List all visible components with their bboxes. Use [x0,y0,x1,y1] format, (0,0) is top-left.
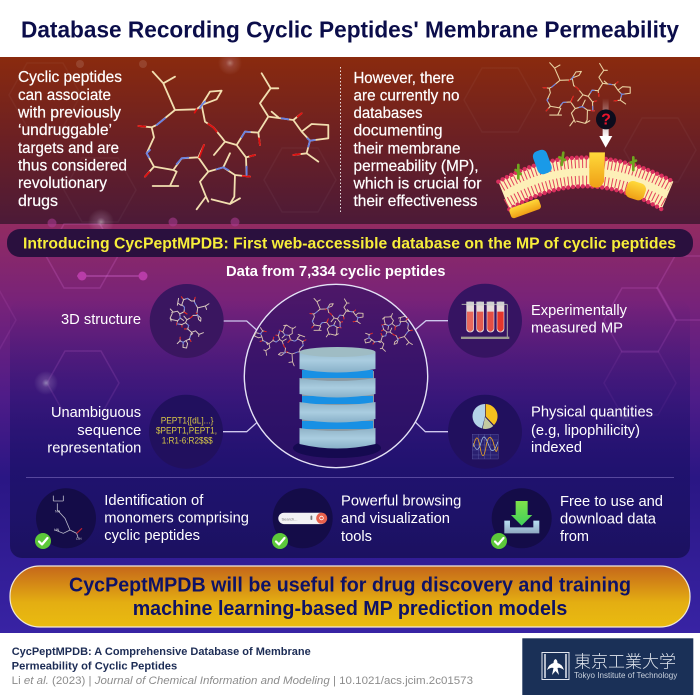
icon: sequence notation: 1:R1-6:R2$$$ [162,436,213,447]
icon: monomer structure: OH [76,537,82,541]
text block: no databases: permeability (MP), [354,158,478,175]
text block: cyclic peptides intro: Cyclic peptides [18,69,122,86]
text block: no databases [353,70,482,210]
label: sequence representation: sequence [77,423,141,439]
text: tools [341,529,372,545]
text block: no databases: documenting [354,123,442,140]
text block: no databases: databases [354,105,423,122]
callout: usefulness pill [10,566,690,627]
molecules around database [250,298,416,367]
text block: no databases: However, there [354,70,454,87]
arrow with question mark: ? [601,112,611,129]
logo: Tokyo Institute of Technology: Tokyo Institute of Technology [574,671,677,680]
text: from [560,529,589,545]
citation: Permeability of Cyclic Peptides [12,660,177,672]
text block: no databases: which is crucial for [353,176,482,192]
divider [26,476,674,478]
citation [12,646,473,687]
icon: monomer structure: HN [54,528,60,532]
icon: cell membrane with proteins [498,148,673,219]
label: physical quantities: indexed [531,440,582,456]
intro banner: Introducing CycPeptMPDB: First web-accessible database on the MP of cyclic peptides [23,235,676,252]
icon: 3D structure [150,284,224,358]
text block: no databases: are currently no [354,88,460,104]
title: Database Recording Cyclic Peptides' Membrane Permeability [21,16,679,42]
icon: monomer structure [35,488,96,549]
icon: sequence notation: $PEPT1,PEPT1, [156,425,217,436]
text [104,493,249,544]
icon: monomer structure: NH [55,509,61,513]
panel: background of top section [0,51,700,224]
callout: usefulness pill: CycPeptMPDB will be useful for drug discovery and training [69,575,631,597]
icon: sequence notation: PEPT1{[dL]...} [161,415,213,426]
text block: cyclic peptides intro: targets and are [18,140,119,157]
molecule: large cyclic peptide [138,72,328,209]
text: download data [560,512,657,528]
text block: no databases: their effectiveness [354,193,478,210]
label: physical quantities: Physical quantities [531,405,653,421]
text [560,494,663,545]
label: sequence representation: representation [47,441,141,457]
label: 3D structure: 3D structure [61,312,141,328]
feature: free download [491,488,663,549]
icon: search bar [272,488,333,549]
footer background [0,633,700,700]
text block: cyclic peptides intro: can associate [18,87,111,104]
logo: Tokyo Institute of Technology [522,638,693,695]
molecule: small cyclic peptide above membrane [543,63,630,126]
text: Free to use and [560,494,663,510]
icon: test tubes [448,284,522,358]
label: sequence representation: Unambiguous [51,405,141,421]
label: physical quantities [531,405,653,456]
text block: cyclic peptides intro: ‘undruggable’ [18,122,112,139]
label: experimentally measured MP [531,303,628,336]
icon: sequence notation [149,395,223,469]
label: physical quantities: (e.g, lipophilicity) [531,423,640,439]
central circle with database [244,284,428,468]
text [341,494,461,545]
icon: database cylinder [293,347,381,458]
text block: cyclic peptides intro: drugs [18,193,58,210]
text: monomers comprising [104,511,249,527]
pie chart [472,404,498,429]
intro banner [7,229,693,257]
connector lines [223,321,449,432]
text block: cyclic peptides intro [17,69,127,210]
heading: data count: Data from 7,334 cyclic peptides [226,264,446,280]
text: and visualization [341,511,450,527]
label: experimentally measured MP: measured MP [531,320,623,336]
text block: cyclic peptides intro: revolutionary [18,175,107,192]
emblem [542,652,569,680]
citation: CycPeptMPDB: A Comprehensive Database of Membrane [12,646,311,658]
divider [340,67,342,213]
text: Powerful browsing [341,494,461,510]
icon: search bar: Search... [282,516,298,522]
logo: Tokyo Institute of Technology: 東京工業大学 [574,648,676,673]
text block: cyclic peptides intro: with previously [17,104,121,122]
icon: download [491,488,552,549]
feature: monomer identification [35,488,249,549]
arrow with question mark [596,98,616,148]
text block: cyclic peptides intro: thus considered [18,158,127,174]
panel: background of lower section [0,209,700,633]
label: experimentally measured MP: Experimentally [531,303,628,319]
icon: pie and wave charts [448,395,522,469]
line chart [472,434,498,459]
citation: Li et al. (2023) | Journal of Chemical Information and Modeling | 10.1021/acs.jcim.2c01573 [12,675,473,687]
panel: dark feature panel [10,300,690,558]
text block: no databases: their membrane [354,140,461,158]
feature: browsing tools [272,488,461,549]
label: sequence representation [47,405,141,457]
text: cyclic peptides [104,528,200,544]
callout: usefulness pill: machine learning-based MP prediction models [133,598,567,620]
text: Identification of [104,493,204,509]
